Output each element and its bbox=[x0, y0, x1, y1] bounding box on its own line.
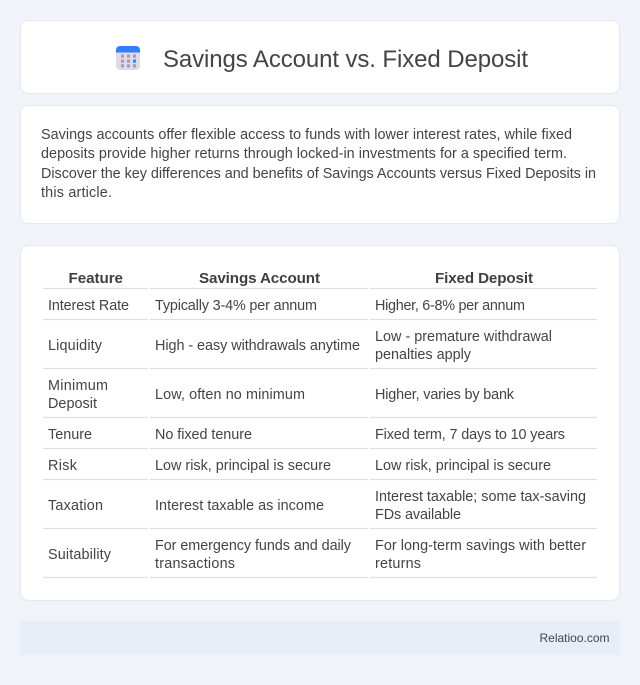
table header row: Fixed Deposit bbox=[435, 270, 533, 287]
row: suitability: returns bbox=[375, 556, 421, 572]
row: liquidity bbox=[48, 329, 552, 363]
panel: introduction bbox=[20, 106, 620, 224]
row: suitability: Suitability bbox=[48, 547, 112, 563]
row: suitability: For long-term savings with better bbox=[375, 538, 586, 554]
row: suitability: For emergency funds and daily bbox=[155, 538, 352, 554]
row: liquidity: penalties apply bbox=[375, 347, 472, 363]
row: interest rate bbox=[48, 298, 525, 314]
text block: introduction: this article. bbox=[41, 185, 112, 201]
table header row: Feature bbox=[68, 270, 123, 287]
title: Savings Account vs. Fixed Deposit bbox=[163, 46, 528, 73]
text block: introduction: Discover the key differences and benefits of Savings Accounts versus Fixed Deposits in bbox=[41, 166, 596, 182]
table header row bbox=[68, 270, 533, 287]
row: tenure: No fixed tenure bbox=[155, 427, 252, 443]
row: tenure: Fixed term, 7 days to 10 years bbox=[375, 427, 565, 443]
footer credit: Relatioo.com bbox=[540, 631, 610, 645]
row: liquidity: Liquidity bbox=[48, 338, 103, 354]
row: taxation: Taxation bbox=[48, 498, 103, 514]
row: liquidity: High - easy withdrawals anytime bbox=[155, 338, 360, 354]
row: tenure bbox=[48, 427, 565, 443]
row: interest rate: Interest Rate bbox=[48, 298, 129, 314]
row: risk: Low risk, principal is secure bbox=[155, 458, 331, 474]
row: taxation: Interest taxable as income bbox=[155, 498, 324, 514]
row: tenure: Tenure bbox=[48, 427, 92, 443]
row: risk: Risk bbox=[48, 458, 78, 474]
row: interest rate: Typically 3-4% per annum bbox=[155, 298, 317, 314]
panel: title header bbox=[20, 20, 620, 94]
text block: introduction: Savings accounts offer flexible access to funds with lower interest rates, while fixed bbox=[41, 127, 572, 143]
row: minimum deposit bbox=[48, 378, 515, 412]
row: liquidity: Low - premature withdrawal bbox=[375, 329, 552, 345]
row: minimum deposit: Deposit bbox=[48, 396, 97, 412]
row: taxation: Interest taxable; some tax-saving bbox=[375, 489, 586, 505]
table header row: Savings Account bbox=[199, 270, 320, 287]
panel: comparison table bbox=[20, 246, 620, 600]
icon: calendar bbox=[116, 46, 140, 70]
row: taxation bbox=[48, 489, 586, 523]
row: minimum deposit: Low, often no minimum bbox=[155, 387, 305, 403]
row: risk bbox=[48, 458, 551, 474]
row: interest rate: Higher, 6-8% per annum bbox=[375, 298, 525, 314]
text block: introduction bbox=[41, 127, 596, 201]
row: risk: Low risk, principal is secure bbox=[375, 458, 551, 474]
row: taxation: FDs available bbox=[375, 507, 461, 523]
row: minimum deposit: Minimum bbox=[48, 378, 108, 394]
row: minimum deposit: Higher, varies by bank bbox=[375, 387, 515, 403]
footer bbox=[20, 621, 620, 655]
row: suitability bbox=[48, 538, 586, 572]
row: suitability: transactions bbox=[155, 556, 235, 572]
text block: introduction: deposits provide higher returns through locked-in investments for a specified term. bbox=[41, 146, 567, 162]
